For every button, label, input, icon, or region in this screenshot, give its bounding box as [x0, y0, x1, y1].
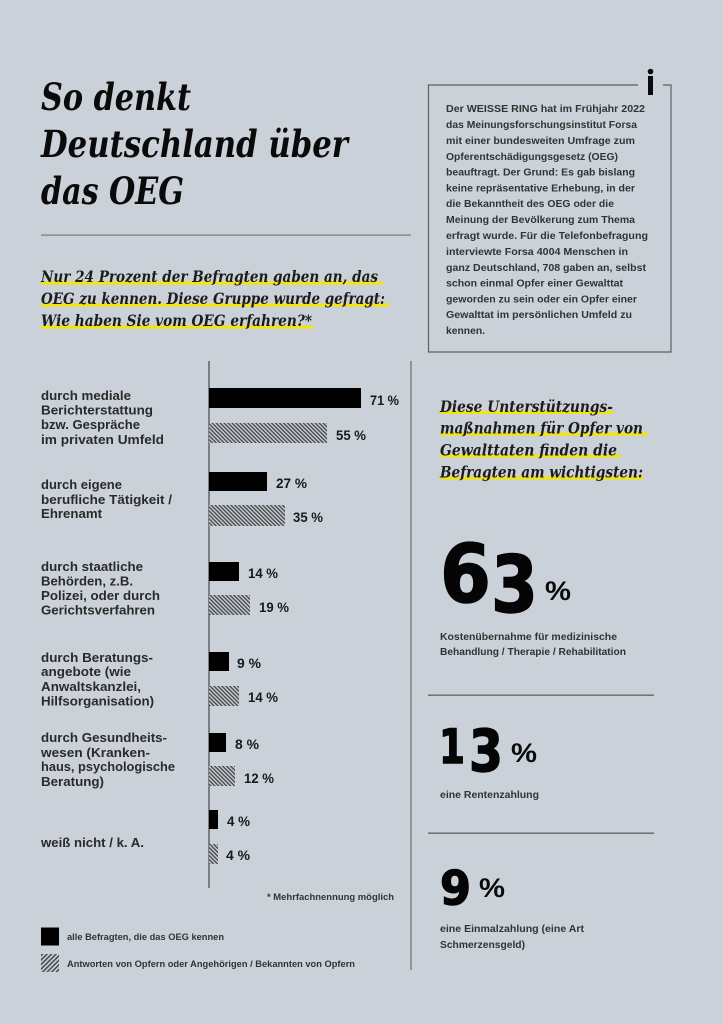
- info text: Der WEISSE RING hat im Frühjahr 2022: [446, 103, 645, 115]
- row: weiß nicht: weiß nicht / k. A.: [40, 835, 144, 850]
- statistic: 13 percent: eine Rentenzahlung: [440, 789, 539, 801]
- row: staatliche Behörden: 14 %: [248, 566, 278, 581]
- title: [40, 75, 350, 213]
- subheading: support measures: Gewalttaten finden die: [440, 440, 617, 460]
- row: berufliche Tätigkeit: durch eigene: [41, 477, 122, 492]
- row: mediale Berichterstattung: 71 %: [370, 393, 399, 408]
- statistic: 9 percent: eine Einmalzahlung (eine Art: [440, 923, 585, 935]
- row: berufliche Tätigkeit: 35 %: [293, 510, 323, 525]
- info text: mit einer bundesweiten Umfrage zum: [446, 135, 635, 147]
- row: mediale Berichterstattung: im privaten Umfeld: [41, 432, 164, 447]
- row: Beratungsangebote: [41, 650, 278, 708]
- statistic: 63 percent: Kostenübernahme für medizinische: [440, 631, 617, 643]
- row: Gesundheitswesen: [40, 730, 274, 789]
- row: staatliche Behörden: Polizei, oder durch: [41, 588, 160, 603]
- subheading: chart question: [40, 267, 389, 330]
- row: berufliche Tätigkeit: Ehrenamt: [41, 506, 103, 521]
- row: mediale Berichterstattung: Berichterstattung: [41, 402, 153, 418]
- row: staatliche Behörden: [41, 559, 289, 618]
- info text: beauftragt. Der Grund: Es gab bislang: [446, 166, 635, 178]
- row: Gesundheitswesen: 12 %: [244, 771, 274, 786]
- statistic: 63 percent: Behandlung / Therapie / Rehabilitation: [440, 646, 626, 658]
- row: staatliche Behörden: Gerichtsverfahren: [41, 602, 155, 618]
- row: Beratungsangebote: 14 %: [248, 690, 278, 705]
- info text: Gewalttat im persönlichen Umfeld zu: [446, 309, 632, 321]
- statistic: 63 percent: 3: [491, 541, 538, 631]
- legend: Antworten von Opfern oder Angehörigen / Bekannten von Opfern: [67, 959, 355, 970]
- row: Gesundheitswesen: Beratung): [41, 774, 104, 789]
- row: mediale Berichterstattung: 55 %: [336, 428, 366, 443]
- row: berufliche Tätigkeit: 27 %: [276, 476, 307, 491]
- bar chart: [40, 361, 399, 888]
- row: mediale Berichterstattung: [41, 388, 399, 447]
- info text: schon einmal Opfer einer Gewalttat: [446, 278, 624, 290]
- row: Gesundheitswesen: 8 %: [235, 737, 259, 752]
- statistic: 9 percent: %: [479, 873, 505, 903]
- info text: Meinung der Bevölkerung zum Thema: [446, 214, 635, 226]
- row: weiß nicht: [40, 810, 250, 864]
- row: Gesundheitswesen: durch Gesundheits-: [41, 730, 167, 745]
- subheading: support measures: [439, 397, 648, 482]
- title: So denkt: [41, 75, 191, 119]
- statistic: 63 percent: 6: [440, 528, 491, 621]
- info box: [428, 69, 671, 352]
- row: berufliche Tätigkeit: [41, 472, 323, 526]
- row: berufliche Tätigkeit: berufliche Tätigkeit /: [41, 492, 172, 507]
- row: Beratungsangebote: angebote (wie: [41, 664, 131, 679]
- statistic: 9 percent: [440, 862, 585, 951]
- subheading: chart question: OEG zu kennen. Diese Gruppe wurde gefragt:: [41, 289, 385, 308]
- footnote: * Mehrfachnennung möglich: [267, 892, 394, 903]
- subheading: chart question: Nur 24 Prozent der Befragten gaben an, das: [40, 267, 378, 286]
- info text: kennen.: [446, 325, 485, 337]
- statistic: 13 percent: [439, 717, 539, 801]
- row: weiß nicht: 4 %: [227, 814, 250, 829]
- info text: die Bekanntheit des OEG oder die: [446, 198, 614, 210]
- statistic: 13 percent: 1: [439, 720, 465, 775]
- row: Beratungsangebote: durch Beratungs-: [41, 650, 153, 665]
- row: staatliche Behörden: durch staatliche: [41, 559, 143, 574]
- title: Deutschland über: [40, 122, 350, 166]
- row: weiß nicht: 4 %: [226, 848, 250, 863]
- statistic: 13 percent: 3: [469, 717, 503, 785]
- info text: das Meinungsforschungsinstitut Forsa: [446, 119, 637, 131]
- subheading: support measures: Diese Unterstützungs-: [439, 397, 613, 416]
- statistic: 63 percent: %: [545, 576, 571, 606]
- subheading: chart question: Wie haben Sie vom OEG erfahren?*: [41, 311, 312, 330]
- statistic: 63 percent: [440, 528, 626, 658]
- row: staatliche Behörden: 19 %: [259, 600, 289, 615]
- row: Beratungsangebote: 9 %: [237, 656, 261, 671]
- icon: info i: [648, 69, 653, 95]
- info text: geworden zu sein oder ein Opfer einer: [446, 294, 637, 306]
- row: Gesundheitswesen: wesen (Kranken-: [40, 745, 150, 760]
- row: Beratungsangebote: Hilfsorganisation): [41, 694, 154, 708]
- statistic: 13 percent: %: [511, 738, 537, 768]
- row: staatliche Behörden: Behörden, z.B.: [41, 574, 133, 588]
- info text: interviewte Forsa 4004 Menschen in: [446, 246, 628, 258]
- title: das OEG: [41, 169, 184, 213]
- row: mediale Berichterstattung: bzw. Gespräche: [41, 417, 140, 432]
- statistic: 9 percent: 9: [440, 862, 471, 916]
- info text: keine repräsentative Erhebung, in der: [446, 182, 635, 194]
- statistic: 9 percent: Schmerzensgeld): [440, 939, 525, 951]
- info text: ganz Deutschland, 708 gaben an, selbst: [446, 262, 647, 274]
- subheading: support measures: maßnahmen für Opfer von: [440, 418, 643, 438]
- row: Beratungsangebote: Anwaltskanzlei,: [41, 679, 141, 694]
- subheading: support measures: Befragten am wichtigsten:: [439, 462, 643, 482]
- info text: erfragt wurde. Für die Telefonbefragung: [446, 230, 648, 242]
- info text: Opferentschädigungsgesetz (OEG): [446, 151, 618, 163]
- info text: [446, 103, 648, 337]
- legend: alle Befragten, die das OEG kennen: [67, 932, 224, 943]
- legend: [41, 928, 355, 972]
- row: Gesundheitswesen: haus, psychologische: [41, 759, 175, 774]
- row: mediale Berichterstattung: durch mediale: [41, 388, 131, 403]
